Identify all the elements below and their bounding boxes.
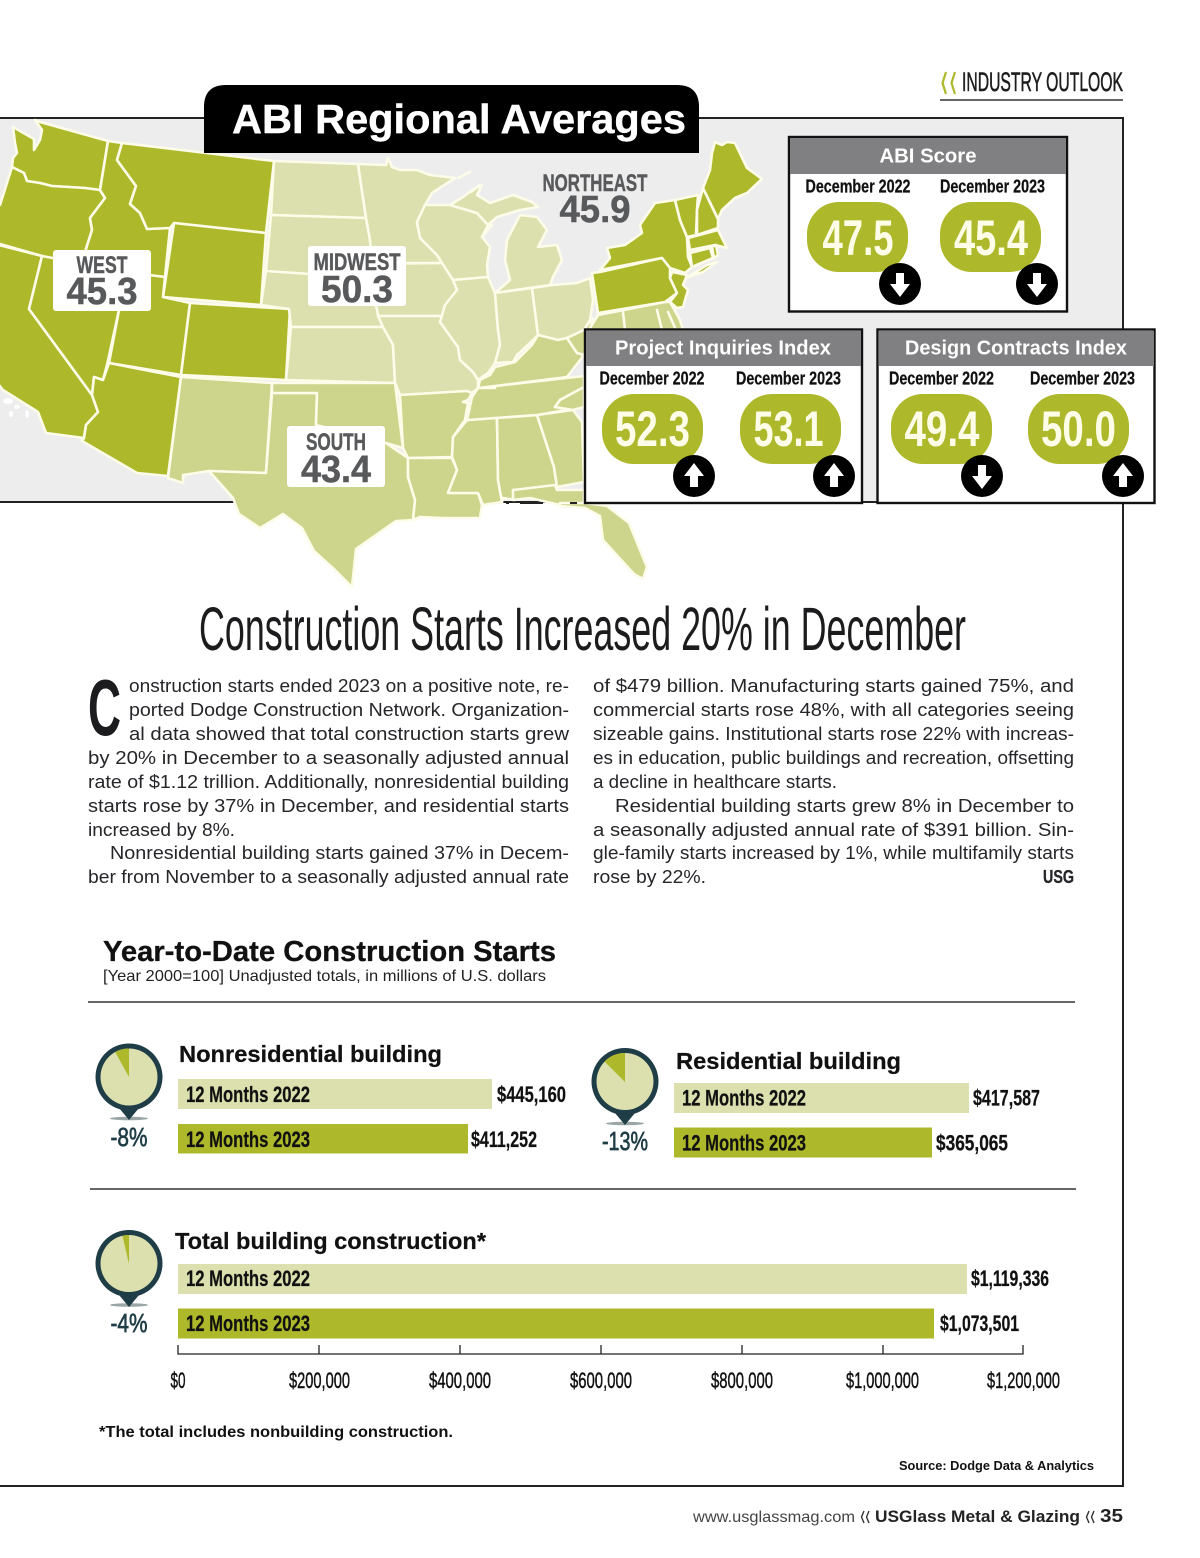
footnote: *The total includes nonbuilding construction. <box>99 1424 453 1441</box>
article column 1: ported Dodge Construction Network. Organization- <box>129 699 569 720</box>
article column 2: of $479 billion. Manufacturing starts gained 75%, and <box>593 675 1074 696</box>
map of US regions <box>0 120 762 587</box>
article column 2: rose by 22%. <box>593 866 706 887</box>
panel: project inquiries index: December 2023 <box>736 368 841 388</box>
bar 2023 <box>178 1124 537 1154</box>
pill: 53.1 <box>740 394 841 464</box>
bar 2023 <box>674 1128 1008 1158</box>
panel: design contracts index: December 2023 <box>1030 368 1135 388</box>
region label: south <box>287 426 385 491</box>
region label: midwest <box>308 246 406 311</box>
article column 1: Nonresidential building starts gained 37% in Decem- <box>110 842 569 863</box>
value axis: $600,000 <box>570 1368 632 1393</box>
bar 2022: $1,119,336 <box>971 1266 1049 1291</box>
panel: ABI score: December 2023 <box>940 176 1045 196</box>
heading: Nonresidential building <box>179 1041 442 1067</box>
lakes and bay details <box>458 172 676 330</box>
pill: 52.3 <box>602 394 703 464</box>
midwest region states <box>261 158 593 395</box>
value axis <box>170 1345 1060 1393</box>
bar 2023 <box>178 1308 1019 1338</box>
page footer: USGlass Metal & Glazing <box>875 1508 1080 1526</box>
section header: industry outlook <box>940 67 1123 100</box>
percent change: -13% <box>602 1126 648 1156</box>
article column 1: al data showed that total construction starts grew <box>129 723 570 744</box>
icon: up arrow <box>1102 455 1144 497</box>
article column 1: starts rose by 37% in December, and residential starts <box>88 795 569 816</box>
region label: west: 45.3 <box>66 271 138 313</box>
region label: northeast: NORTHEAST <box>542 170 648 197</box>
panel: project inquiries index: Project Inquiries Index <box>615 338 831 360</box>
bar 2022 <box>178 1079 566 1109</box>
value axis: $400,000 <box>429 1368 491 1393</box>
title banner <box>204 85 699 153</box>
bar 2022 <box>178 1264 1049 1294</box>
icon: pie pin -13% <box>592 1048 658 1125</box>
source: Source: Dodge Data & Analytics <box>899 1459 1094 1473</box>
value axis: $1,000,000 <box>846 1368 919 1393</box>
title banner: ABI Regional Averages <box>232 96 686 142</box>
article column 2: gle-family starts increased by 1%, while multifamily starts <box>593 842 1074 863</box>
chart heading <box>103 936 556 985</box>
chart heading: Year-to-Date Construction Starts <box>103 936 556 968</box>
panel: ABI score: December 2022 <box>806 176 910 196</box>
panel: ABI score: ABI Score <box>880 146 976 168</box>
west region states <box>0 120 290 476</box>
pill: 47.5 <box>807 202 908 272</box>
bar 2022: 12 Months 2022 <box>186 1266 310 1291</box>
article column 2: commercial starts rose 48%, with all categories seeing <box>593 699 1074 720</box>
article column 2: a seasonally adjusted annual rate of $391 billion. Sin- <box>593 819 1074 840</box>
region label: northeast <box>542 170 648 231</box>
chart: nonresidential building <box>96 1041 566 1154</box>
bar 2022: 12 Months 2022 <box>682 1086 806 1110</box>
chart: total building construction <box>96 1228 1060 1393</box>
pill: 49.4 <box>891 394 992 464</box>
pill: 50.0 <box>1028 394 1129 464</box>
pill: 50.0: 50.0 <box>1041 401 1116 457</box>
panel: project inquiries index <box>585 330 862 503</box>
region label: south: 43.4 <box>301 449 371 491</box>
icon: up arrow <box>673 455 715 497</box>
article column 1: ber from November to a seasonally adjusted annual rate <box>88 866 569 887</box>
channel islands <box>3 398 29 418</box>
icon: down arrow <box>1016 263 1058 305</box>
icon: up arrow <box>813 455 855 497</box>
pill: 45.4: 45.4 <box>954 210 1028 266</box>
panel: design contracts index <box>878 330 1154 503</box>
northeast region states <box>592 142 762 313</box>
article column 2: USG <box>1043 866 1074 887</box>
value axis: $1,200,000 <box>987 1368 1060 1393</box>
value axis: $800,000 <box>711 1368 773 1393</box>
chart heading: [Year 2000=100] Unadjusted totals, in millions of U.S. dollars <box>103 968 546 985</box>
bar 2022: 12 Months 2022 <box>186 1082 310 1107</box>
chart: residential building <box>592 1048 1040 1158</box>
map background panel <box>0 118 1123 502</box>
panel: design contracts index: December 2022 <box>889 368 994 388</box>
icon: down arrow <box>879 263 921 305</box>
page footer: www.usglassmag.com <box>692 1509 855 1526</box>
region label: midwest: 50.3 <box>321 269 393 311</box>
page footer <box>692 1506 1123 1526</box>
icon: pie pin -4% <box>96 1230 162 1307</box>
drop cap: C <box>88 663 121 752</box>
bar 2022: $417,587 <box>973 1086 1040 1110</box>
article column 2: a decline in healthcare starts. <box>593 771 837 792</box>
icon: down arrow <box>961 455 1003 497</box>
article column 2: es in education, public buildings and recreation, offsetting <box>593 747 1074 768</box>
bar 2023: 12 Months 2023 <box>186 1311 310 1336</box>
remnants of panel rule along the gulf <box>506 502 577 504</box>
panel: project inquiries index: December 2022 <box>600 368 704 388</box>
region label: south: SOUTH <box>306 429 366 456</box>
region label: west: WEST <box>76 252 128 279</box>
article column 1 <box>88 663 570 887</box>
pill: 47.5: 47.5 <box>822 210 894 266</box>
region label: midwest: MIDWEST <box>314 249 401 276</box>
bar 2023: $411,252 <box>471 1127 537 1152</box>
region label: west <box>53 250 151 313</box>
heading: Total building construction* <box>175 1228 486 1254</box>
bar 2023: 12 Months 2023 <box>682 1130 806 1156</box>
panel: ABI score <box>789 137 1067 312</box>
article column 2: Residential building starts grew 8% in December to <box>615 795 1074 816</box>
page footer: 35 <box>1100 1506 1123 1526</box>
article column 1: onstruction starts ended 2023 on a positive note, re- <box>129 675 569 696</box>
article column 1: by 20% in December to a seasonally adjusted annual <box>88 747 569 768</box>
region label: northeast: 45.9 <box>560 189 630 231</box>
pill: 52.3: 52.3 <box>615 401 690 457</box>
bar 2022: $445,160 <box>497 1082 566 1107</box>
value axis: $0 <box>170 1368 186 1393</box>
percent change: -8% <box>110 1122 148 1152</box>
article column 1: rate of $1.12 trillion. Additionally, nonresidential building <box>88 771 569 792</box>
bar 2023: $1,073,501 <box>940 1311 1019 1336</box>
heading: Residential building <box>676 1048 901 1074</box>
pill: 45.4 <box>940 202 1041 272</box>
pill: 49.4: 49.4 <box>904 401 980 457</box>
pill: 53.1: 53.1 <box>754 401 824 457</box>
bar 2023: 12 Months 2023 <box>186 1127 310 1152</box>
article column 2 <box>593 675 1074 887</box>
bar 2022 <box>674 1083 1040 1113</box>
panel: design contracts index: Design Contracts Index <box>905 338 1127 360</box>
icon: pie pin -8% <box>96 1044 162 1120</box>
south region states <box>168 302 683 587</box>
value axis: $200,000 <box>289 1368 350 1393</box>
percent change: -4% <box>110 1308 148 1338</box>
bar 2023: $365,065 <box>936 1130 1008 1156</box>
article column 1: increased by 8%. <box>88 819 235 840</box>
article column 2: sizeable gains. Institutional starts rose 22% with increas- <box>593 723 1074 744</box>
